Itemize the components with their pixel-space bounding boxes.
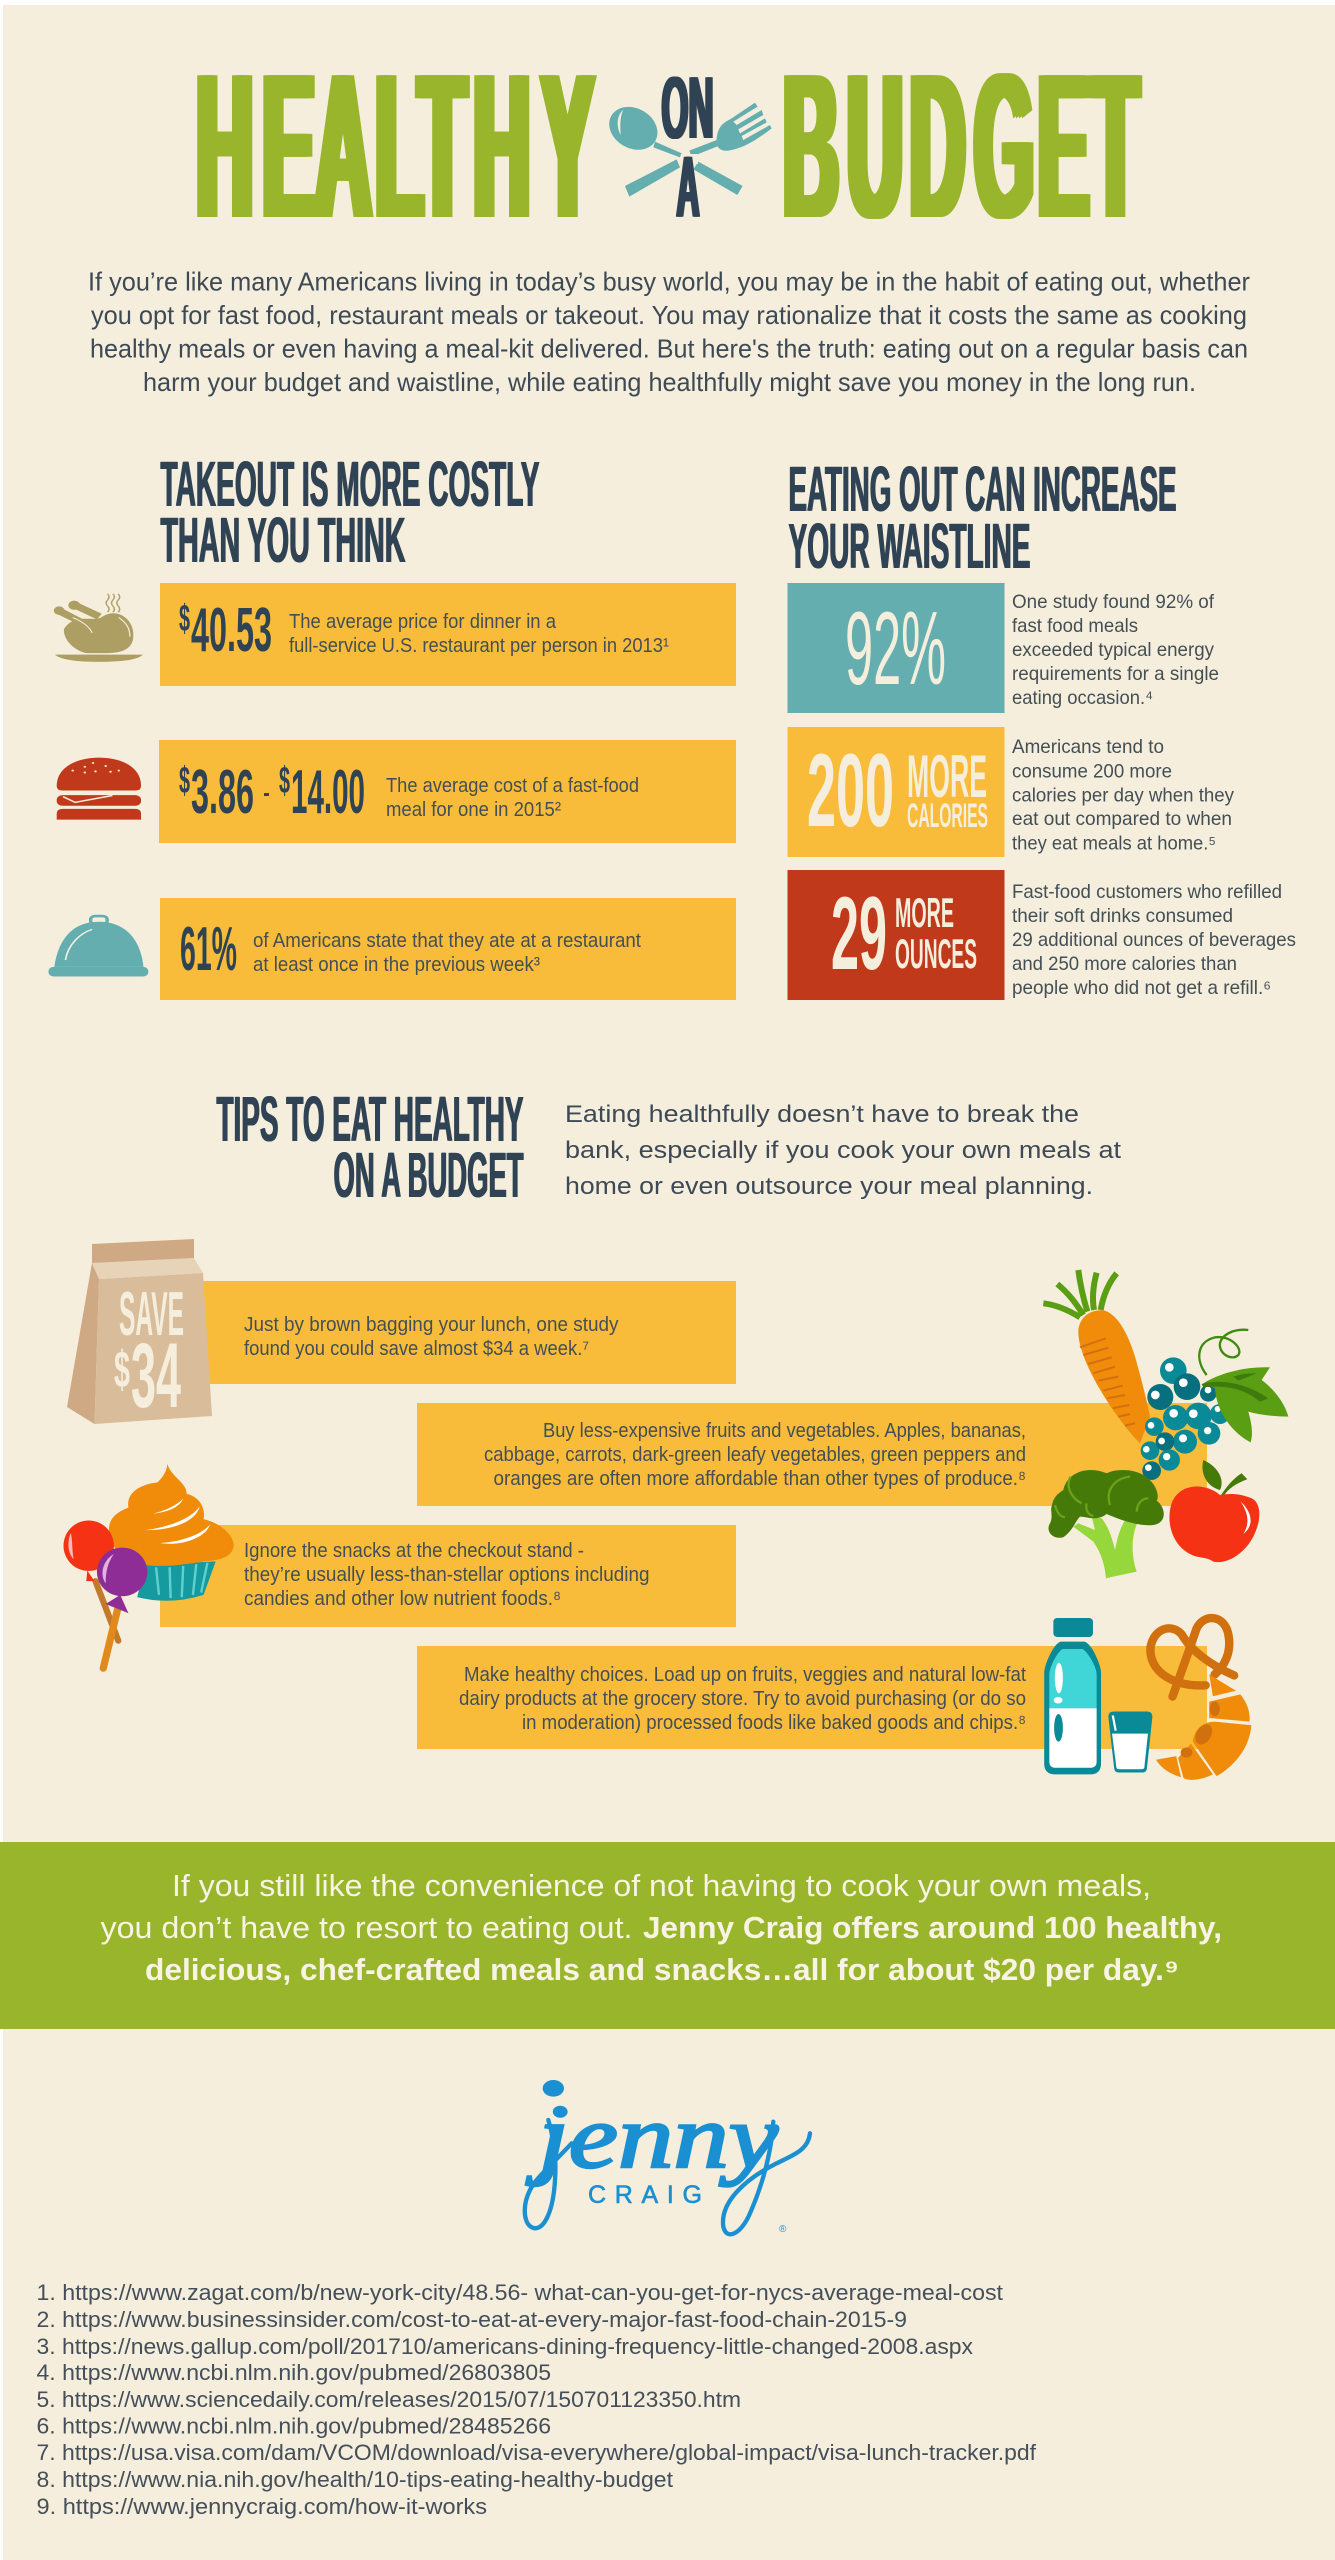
stat box: 61 percent: 61% [180, 915, 237, 984]
bottle [1053, 1618, 1093, 1637]
stat box: dinner price: full-service U.S. restaurant per person in 2013¹ [289, 635, 669, 657]
title: A [675, 139, 698, 236]
tips intro text [565, 1101, 1121, 1200]
stat tile: 200 more calories: CALORIES [907, 797, 988, 835]
title word: on [660, 58, 715, 157]
panel: waistline [788, 453, 1296, 1000]
tip box 4: Make healthy choices. Load up on fruits, veggies and natural low-fat [464, 1664, 1026, 1686]
text: 200 calories: consume 200 more [1012, 760, 1172, 782]
heading: tips [216, 1083, 524, 1211]
tip box 2: Buy less-expensive fruits and vegetables. Apples, bananas, [543, 1420, 1026, 1442]
apple [1202, 1460, 1222, 1490]
title word: a [675, 139, 701, 236]
tips intro text: bank, especially if you cook your own meals at [565, 1137, 1121, 1164]
stat box: fast-food cost: $ [279, 760, 290, 802]
tips intro text: home or even outsource your meal planning. [565, 1173, 1093, 1200]
title word: healthy: HEALTHY [192, 32, 589, 262]
text: 200 calories: calories per day when they [1012, 784, 1234, 806]
stat box: dinner price: 40.53 [191, 596, 272, 665]
heading: takeout [160, 448, 540, 576]
tip box 3 [160, 1525, 736, 1627]
title [192, 30, 1143, 262]
references list: 1. https://www.zagat.com/b/new-york-city/48.56- what-can-you-get-for-nycs-average-meal-cost [36, 2280, 1004, 2305]
panel: takeout costs [48, 448, 736, 1000]
stat tile: 200 more calories: 200 [807, 733, 894, 849]
icon: paper bag save 34 [67, 1239, 212, 1427]
text: 29 ounces [1012, 881, 1296, 999]
tip box 2: oranges are often more affordable than other types of produce.⁸ [494, 1468, 1026, 1490]
call-to-action band [0, 1842, 1335, 2029]
call-to-action band: you don’t have to resort to eating out. [100, 1910, 632, 1945]
tip box 1: Just by brown bagging your lunch, one study [244, 1314, 618, 1336]
heading: eating out [788, 453, 1177, 582]
text: 200 calories: eat out compared to when [1012, 808, 1232, 830]
title word: budget: BUDGET [779, 30, 1134, 261]
text: 92 percent: One study found 92% of [1012, 591, 1215, 613]
tip box 4 [417, 1646, 1207, 1749]
logo: jenny craig: CRAIG [588, 2181, 702, 2209]
icon: milk bottle, pretzel and croissant [1044, 1618, 1251, 1780]
stat box: fast-food cost: 14.00 [291, 758, 365, 827]
text: 29 ounces: 29 additional ounces of beverages [1012, 929, 1296, 951]
stat box: dinner price: $ [179, 598, 190, 640]
references list: 9. https://www.jennycraig.com/how-it-works [36, 2494, 487, 2519]
tips intro text: Eating healthfully doesn’t have to break the [565, 1101, 1079, 1128]
tip box 4: in moderation) processed foods like baked goods and chips.⁸ [522, 1712, 1026, 1734]
stat box: 61 percent [160, 898, 736, 1000]
tip box 4: dairy products at the grocery store. Try to avoid purchasing (or do so [459, 1688, 1026, 1710]
references list: 5. https://www.sciencedaily.com/releases/2015/07/150701123350.htm [36, 2387, 741, 2412]
stat box: fast-food cost: $ [179, 760, 190, 802]
intro paragraph: If you’re like many Americans living in today’s busy world, you may be in the habit of eating out, whether [88, 266, 1250, 296]
pretzel [1150, 1618, 1234, 1697]
heading: eating out: YOUR WAISTLINE [788, 510, 1030, 582]
stat box: fast-food cost: meal for one in 2015² [386, 799, 561, 821]
stat tile: 29 more ounces [788, 870, 1004, 1000]
tip box 3: they’re usually less-than-stellar options including [244, 1564, 650, 1586]
stat box: fast-food cost: 3.86 [191, 758, 254, 827]
logo: jenny craig: ® [779, 2224, 787, 2235]
broccoli [1073, 1517, 1139, 1578]
references list: 8. https://www.nia.nih.gov/health/10-tips-eating-healthy-budget [36, 2467, 674, 2492]
text: 29 ounces: and 250 more calories than [1012, 953, 1237, 975]
call-to-action band: Jenny Craig offers around 100 healthy, [643, 1910, 1222, 1945]
intro paragraph [88, 266, 1250, 397]
icon: serving cloche [48, 916, 148, 976]
intro paragraph: healthy meals or even having a meal-kit delivered. But here's the truth: eating out on a regular basis can [90, 334, 1248, 364]
call-to-action band: If you still like the convenience of not having to cook your own meals, [172, 1868, 1151, 1903]
icon: cupcake and lollipops [63, 1464, 234, 1668]
leaf and tendril [1203, 1367, 1288, 1442]
text: 29 ounces: people who did not get a refill.⁶ [1012, 977, 1271, 999]
stat tile: 29 more ounces: OUNCES [895, 930, 977, 977]
stat tile: 92 percent [788, 583, 1004, 713]
text: 29 ounces: Fast-food customers who refilled [1012, 881, 1282, 903]
stat tile: 29 more ounces: 29 [831, 876, 887, 992]
stat box: dinner price [160, 583, 736, 686]
stat tile: 29 more ounces: MORE [895, 889, 954, 936]
stat box: fast-food cost: The average cost of a fast-food [386, 775, 639, 797]
text: 92 percent: requirements for a single [1012, 663, 1219, 685]
icon: carrot, grapes, broccoli and apple [1043, 1270, 1288, 1578]
icon: paper bag save 34: SAVE [119, 1280, 184, 1349]
text: 29 ounces: their soft drinks consumed [1012, 905, 1233, 927]
call-to-action band: delicious, chef-crafted meals and snacks…all for about $20 per day.⁹ [145, 1952, 1179, 1987]
tip box 3: candies and other low nutrient foods.⁸ [244, 1588, 561, 1610]
panel: tips: TIPS TO EAT HEALTHY [216, 1083, 523, 1155]
carrot leaves [1043, 1270, 1117, 1317]
references list: 6. https://www.ncbi.nlm.nih.gov/pubmed/28485266 [36, 2414, 551, 2438]
stat tile: 200 more calories: MORE [907, 743, 987, 810]
stat box: 61 percent: at least once in the previous week³ [253, 954, 540, 976]
tip box 2 [417, 1403, 1207, 1506]
icon: paper bag save 34: 34 [131, 1325, 181, 1427]
tip box 2: cabbage, carrots, dark-green leafy vegetables, green peppers and [484, 1444, 1026, 1466]
text: 200 calories: Americans tend to [1012, 736, 1164, 758]
text: 92 percent: exceeded typical energy [1012, 639, 1214, 661]
croissant [1156, 1674, 1251, 1780]
icon: paper bag save 34: $ [114, 1341, 130, 1399]
heading: takeout: THAN YOU THINK [160, 504, 405, 576]
panel: takeout costs: TAKEOUT IS MORE COSTLY [160, 448, 539, 520]
stat box: fast-food cost [159, 740, 736, 843]
icon: crossed spoon and fork [601, 98, 772, 197]
text: 200 calories: they eat meals at home.⁵ [1012, 832, 1216, 854]
references list: 4. https://www.ncbi.nlm.nih.gov/pubmed/26803805 [36, 2360, 551, 2385]
carrot body [1078, 1310, 1150, 1443]
glass [1108, 1711, 1152, 1773]
references list: 7. https://usa.visa.com/dam/VCOM/download/visa-everywhere/global-impact/visa-lunch-tracker.pdf [36, 2440, 1037, 2465]
intro paragraph: harm your budget and waistline, while eating healthfully might save you money in the long run. [143, 367, 1196, 397]
tip box 3: Ignore the snacks at the checkout stand - [244, 1540, 584, 1562]
panel: tips [63, 1083, 1288, 1780]
grapes [1141, 1357, 1230, 1480]
logo: jenny craig: jenny [526, 2088, 778, 2187]
text: 92 percent [1012, 591, 1219, 709]
icon: roast chicken [54, 594, 143, 662]
stat tile: 92 percent: 92% [845, 591, 946, 707]
logo: jenny craig [525, 2080, 810, 2235]
references list: 3. https://news.gallup.com/poll/201710/americans-dining-frequency-little-changed-2008.aspx [36, 2334, 974, 2359]
panel: tips: ON A BUDGET [333, 1139, 523, 1211]
references list: 2. https://www.businessinsider.com/cost-to-eat-at-every-major-fast-food-chain-2015-9 [36, 2307, 907, 2332]
title: ON [660, 58, 712, 157]
references list [36, 2280, 1037, 2519]
tip box 1: found you could save almost $34 a week.⁷ [244, 1338, 589, 1360]
text: 92 percent: fast food meals [1012, 615, 1138, 637]
stat box: dinner price: The average price for dinner in a [289, 611, 557, 633]
stat box: 61 percent: of Americans state that they ate at a restaurant [253, 930, 641, 952]
text: 92 percent: eating occasion.⁴ [1012, 687, 1153, 709]
intro paragraph: you opt for fast food, restaurant meals or takeout. You may rationalize that it costs the same as cooking [91, 300, 1247, 330]
tip box 1 [200, 1281, 736, 1384]
icon: burger [57, 758, 141, 820]
text: 200 calories [1012, 736, 1234, 854]
